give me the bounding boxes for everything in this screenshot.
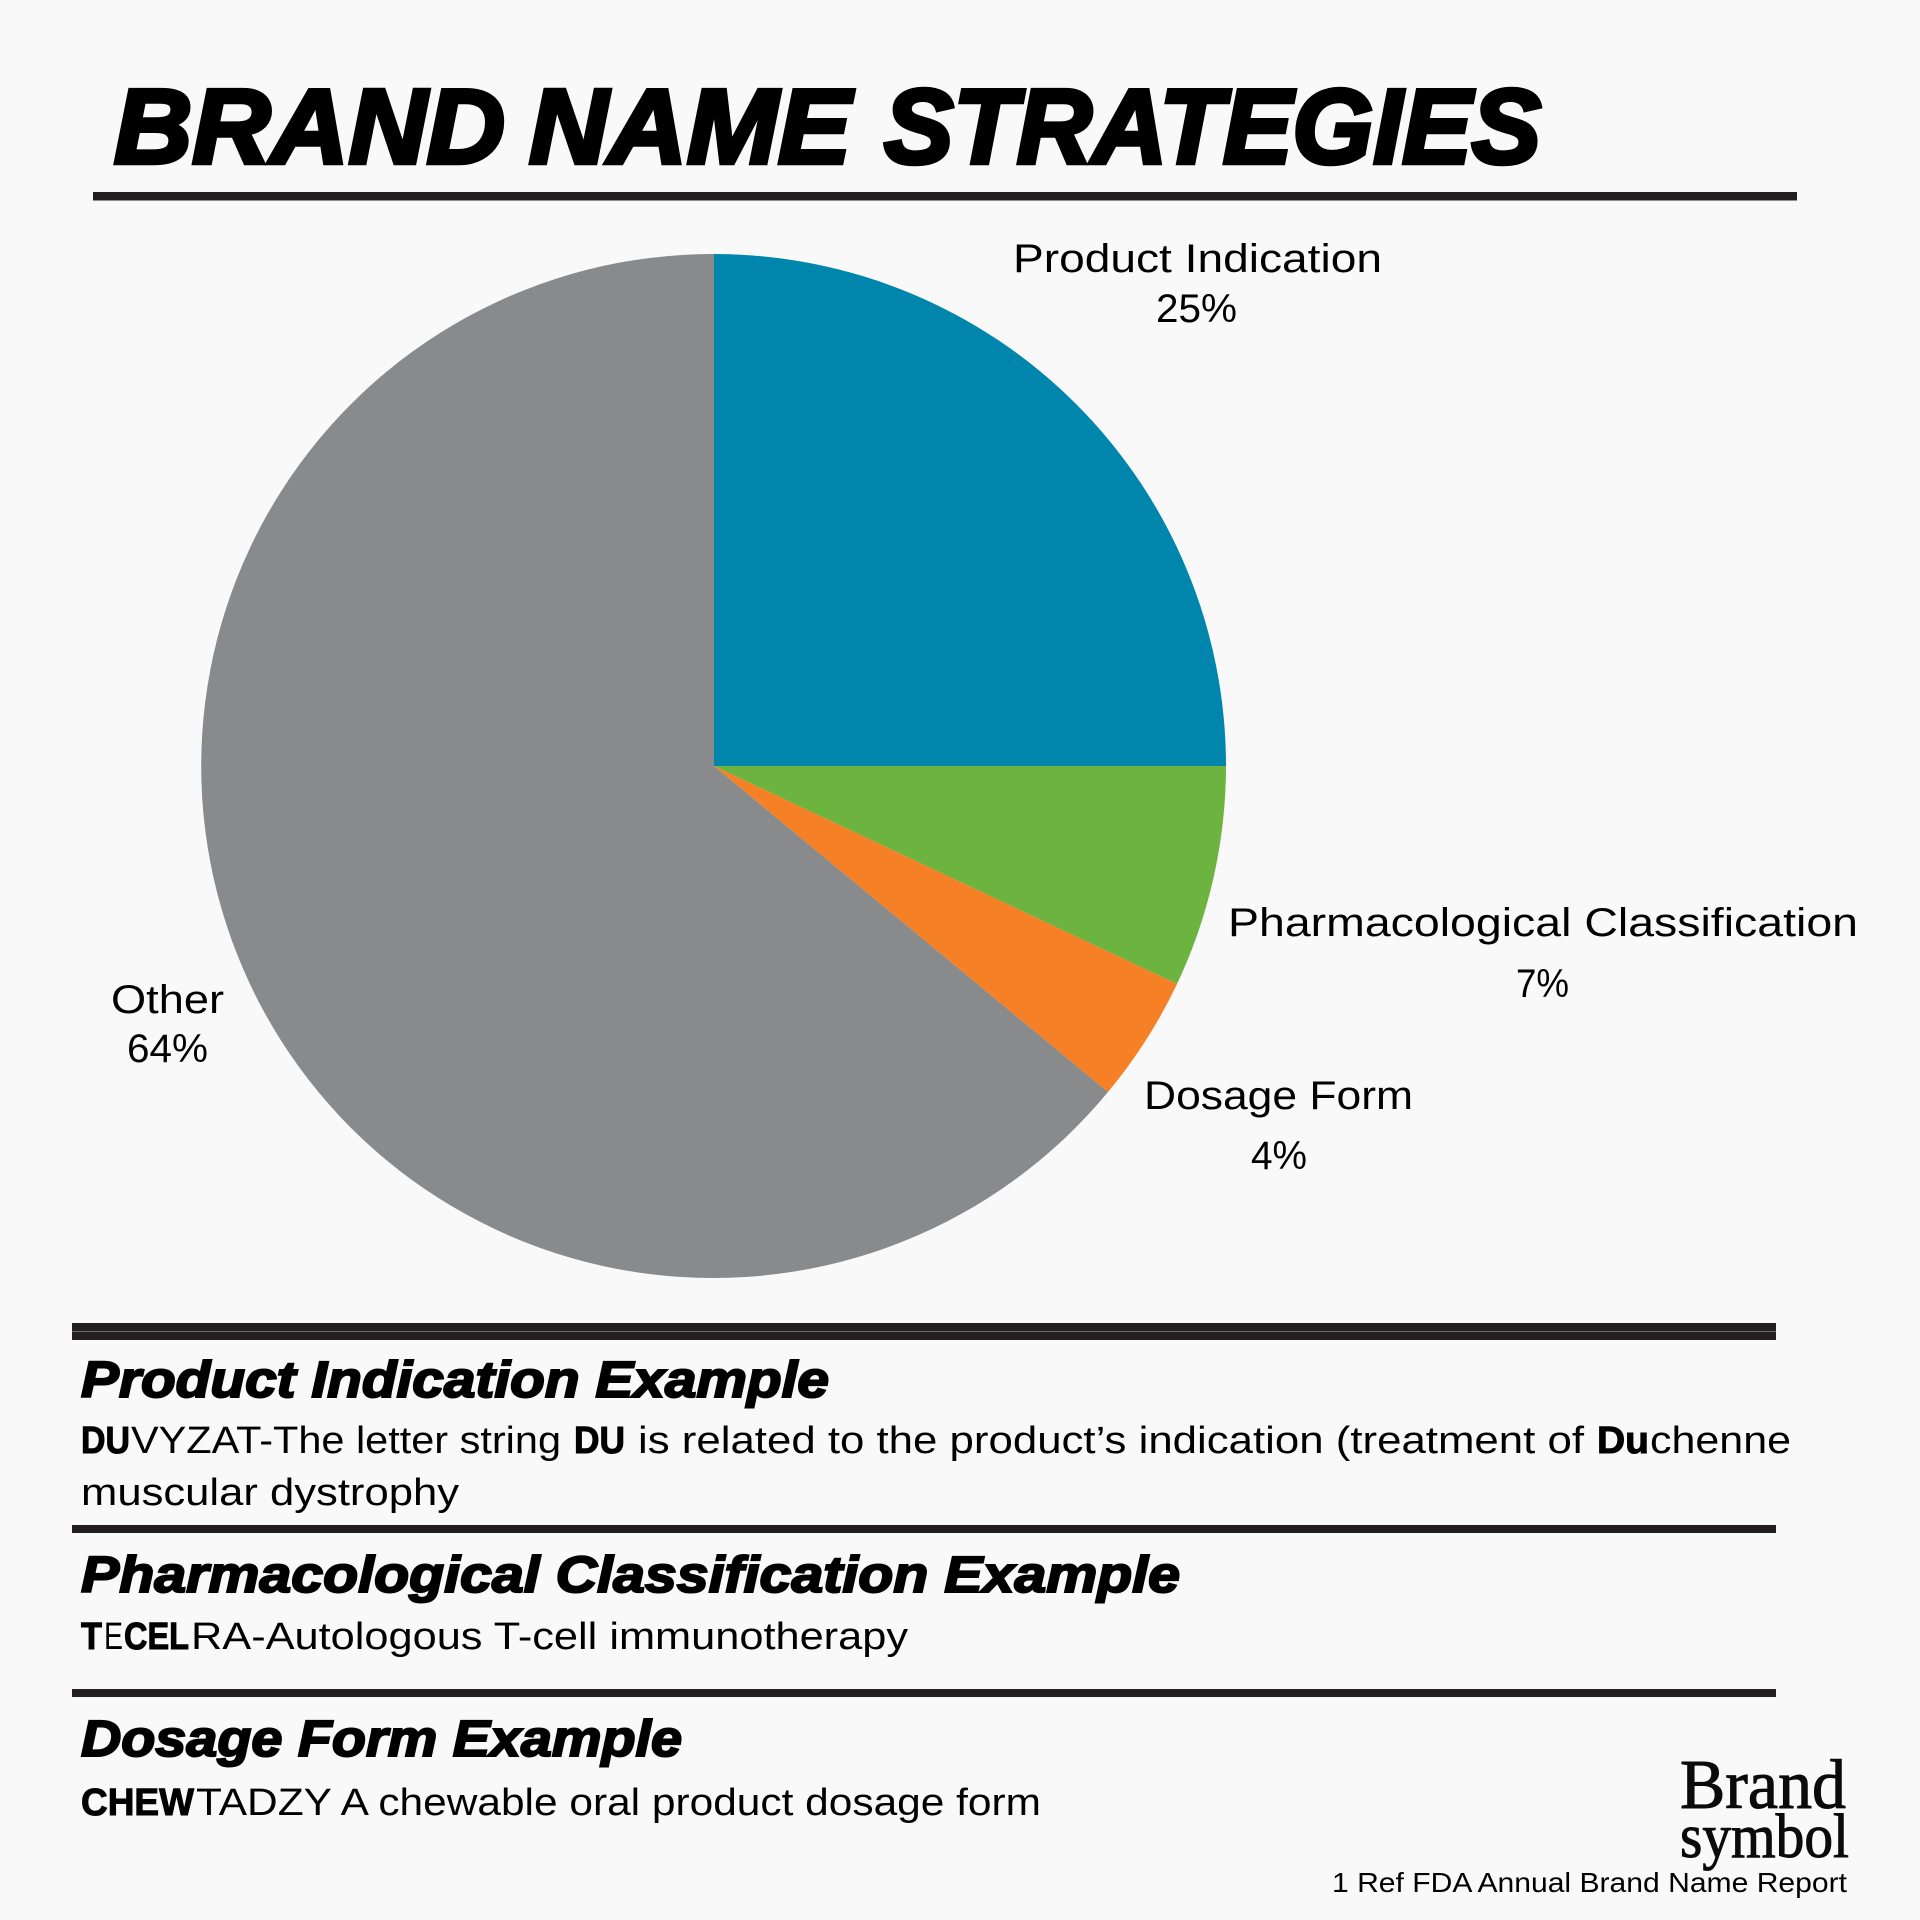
label: dosage form: Dosage Form [1144,1074,1413,1118]
source note: 1 Ref FDA Annual Brand Name Report [1332,1867,1847,1898]
text block: is related to the product’s indication (treatment of [638,1420,1584,1462]
title: BRAND [114,68,505,186]
label: product indication: 25% [1156,287,1237,331]
label: pharmacological classification: 7% [1516,962,1569,1006]
text block: muscular dystrophy [81,1472,459,1514]
logo: brand symbol: Brand [1680,1747,1846,1824]
text block: chenne [1650,1420,1791,1462]
label: other: 64% [127,1027,208,1071]
label: dosage form [1144,1074,1413,1178]
panel: dosage form example [81,1710,1041,1824]
text block [81,1420,1791,1514]
text block: T [81,1616,102,1658]
title: STRATEGIES [884,68,1541,186]
pie chart [201,254,1226,1278]
text block: RA-Autologous T-cell immunotherapy [191,1616,908,1658]
text block: DU [574,1420,625,1462]
text block: VYZAT-The letter string [131,1420,561,1462]
label: other [111,978,224,1071]
text block: CHEW [81,1782,194,1824]
text block: CEL [124,1616,189,1658]
heading: Dosage Form Example [81,1710,682,1767]
slice: dosage form 4% [714,766,1177,1092]
logo: brand symbol: symbol [1680,1803,1849,1871]
text block: E [104,1616,123,1658]
label: pharmacological classification: Pharmacological Classification [1228,901,1858,945]
label: other: Other [111,978,224,1022]
title [114,68,1541,186]
slice: pharmacological classification 7% [714,766,1226,984]
label: product indication: Product Indication [1013,237,1382,281]
text block: DU [81,1420,130,1462]
title: NAME [529,68,854,186]
logo: brand symbol [1680,1747,1849,1871]
label: pharmacological classification [1228,901,1858,1006]
panel: pharmacological classification example [81,1546,1180,1658]
text block: Du [1597,1420,1649,1462]
label: dosage form: 4% [1251,1134,1307,1178]
slice: product indication 25% [714,254,1226,766]
label: product indication [1013,237,1382,331]
heading: Product Indication Example [81,1351,829,1408]
slice: other 64% [201,254,1108,1278]
panel: product indication example [81,1351,1791,1514]
heading: Pharmacological Classification Example [81,1546,1180,1603]
text block: TADZY A chewable oral product dosage form [196,1782,1041,1824]
